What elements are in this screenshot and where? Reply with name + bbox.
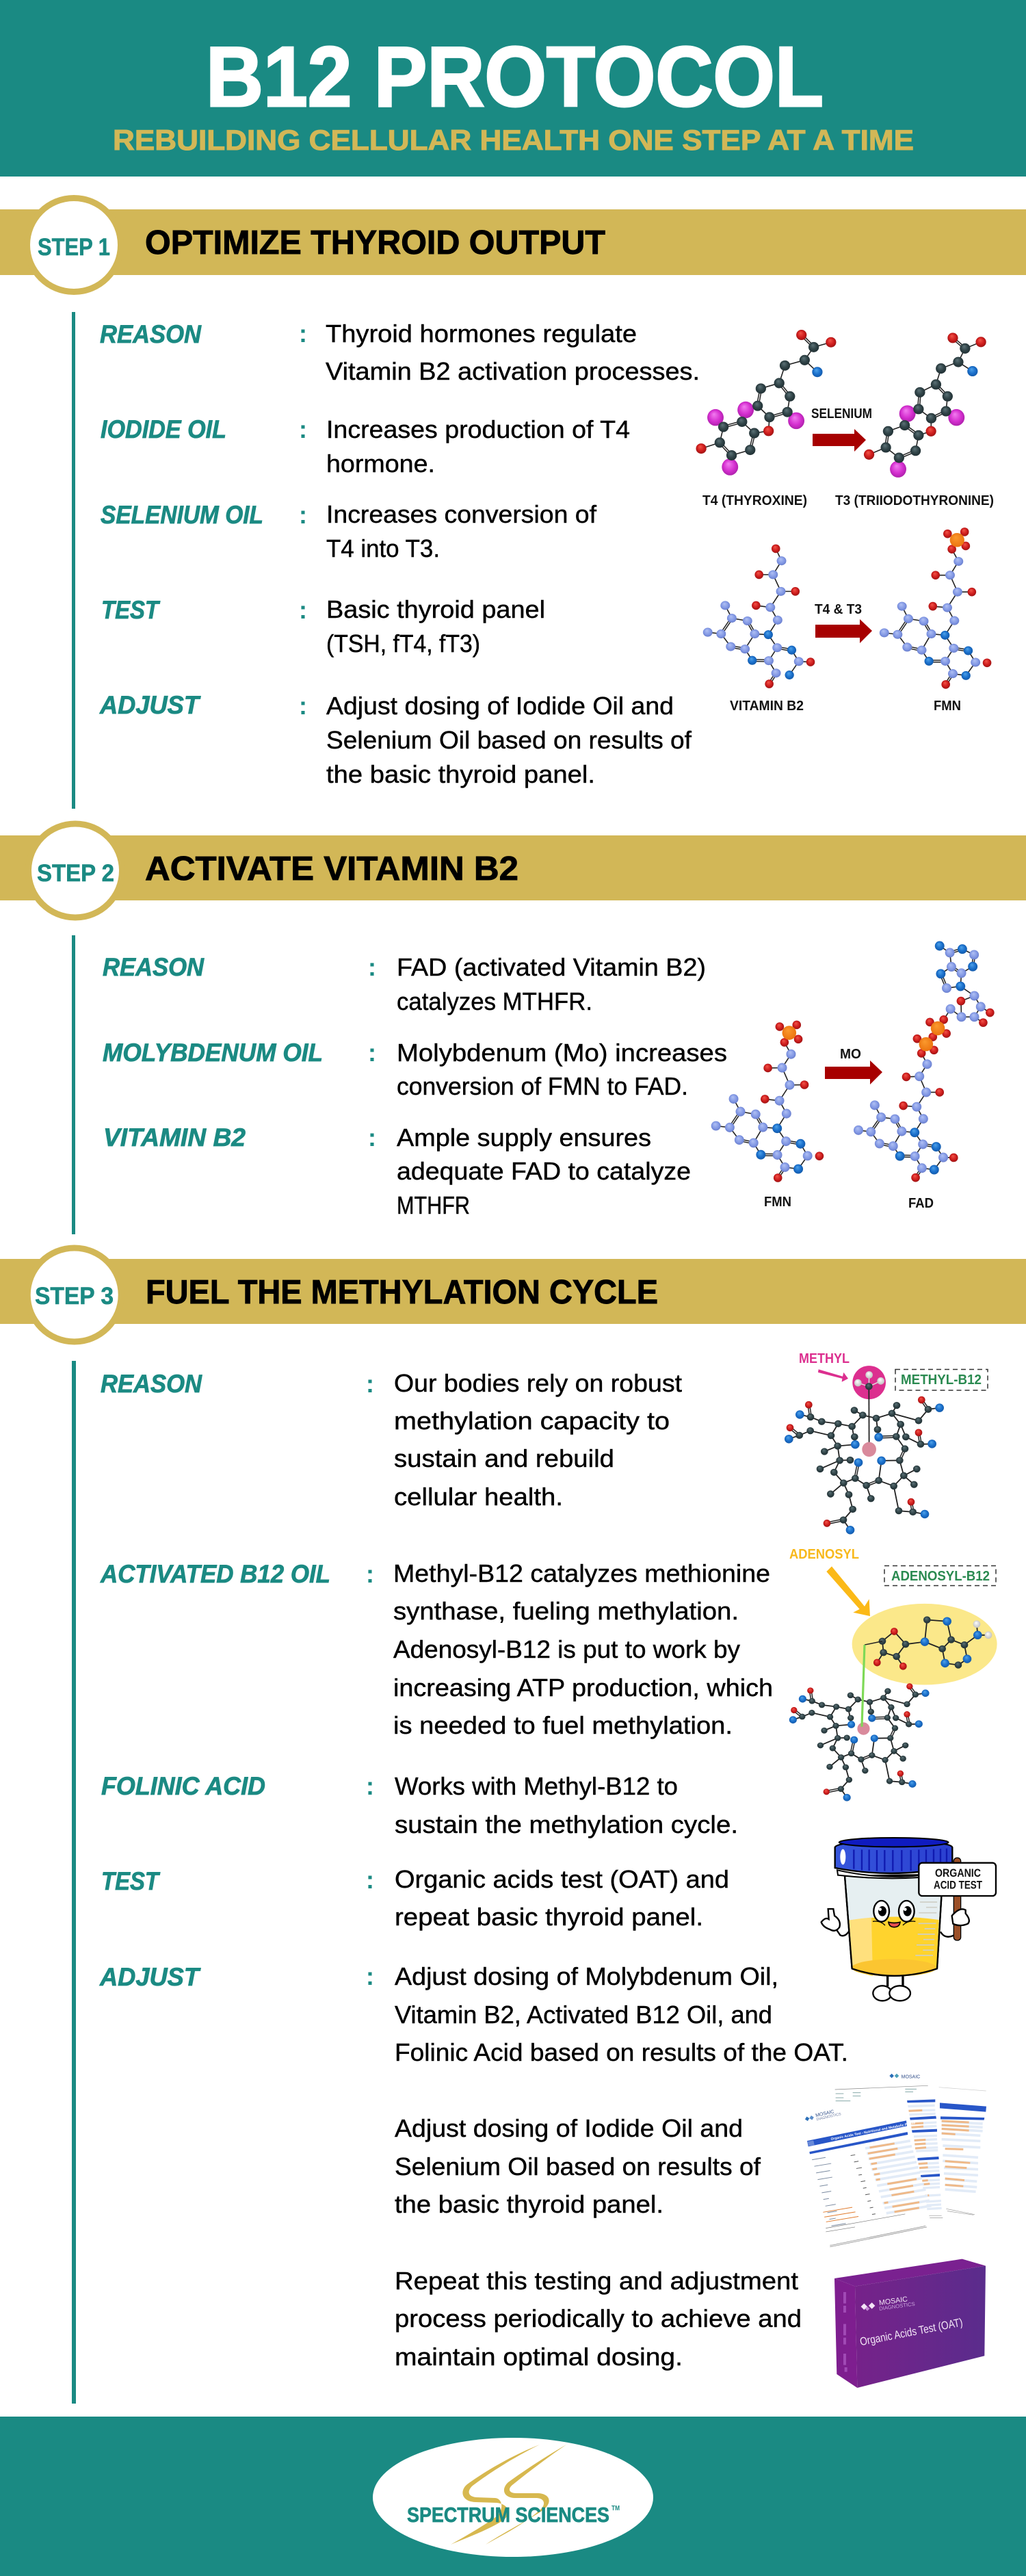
row: reason: Thyroid hormones regulate	[326, 320, 637, 348]
row: test: :	[299, 596, 307, 624]
row: reason: sustain and rebuild	[394, 1444, 614, 1472]
row: folinic acid: FOLINIC ACID	[101, 1772, 265, 1800]
step 3 header: STEP 3	[35, 1283, 114, 1310]
row: adjust: the basic thyroid panel.	[326, 760, 595, 788]
row: molybdenum oil: conversion of FMN to FAD.	[397, 1072, 688, 1100]
row: vitamin B2	[103, 1123, 691, 1219]
row: reason: cellular health.	[394, 1483, 563, 1511]
row: test: :	[366, 1866, 374, 1894]
molecule: FMN step 2	[711, 1021, 824, 1182]
arrow: selenium	[811, 406, 872, 452]
box logo: DIAGNOSTICS	[879, 2301, 915, 2312]
adjust paragraph 3: maintain optimal dosing.	[395, 2343, 683, 2371]
step 2 header	[0, 821, 1026, 921]
sign text	[934, 1866, 982, 1891]
label: adenosyl: ADENOSYL	[789, 1547, 859, 1562]
row: activated B12 oil: ACTIVATED B12 OIL	[100, 1560, 330, 1588]
adjust paragraph 2: the basic thyroid panel.	[395, 2190, 663, 2218]
row: adjust: Vitamin B2, Activated B12 Oil, and	[395, 2001, 772, 2029]
title: B12 PROTOCOL	[206, 30, 824, 125]
row: vitamin B2: Ample supply ensures	[397, 1123, 651, 1152]
row: folinic acid	[101, 1772, 738, 1838]
step 3 header: FUEL THE METHYLATION CYCLE	[146, 1274, 658, 1311]
row: test: Basic thyroid panel	[326, 595, 545, 623]
arrow: MO: MO	[840, 1047, 861, 1062]
label: T3: T3 (TRIIODOTHYRONINE)	[835, 493, 994, 508]
row: adjust	[99, 1962, 848, 2066]
step 3 header	[0, 1245, 1026, 1345]
row: reason	[101, 1369, 682, 1511]
report header logo: MOSAIC	[902, 2074, 920, 2079]
step 1 header: STEP 1	[38, 234, 110, 261]
image: OAT kit box	[834, 2259, 986, 2388]
sign text: ACID TEST	[934, 1879, 982, 1891]
row: reason: Our bodies rely on robust	[394, 1369, 682, 1397]
row: adjust: :	[366, 1962, 374, 1990]
report page 1: DIAGNOSTICS	[816, 2112, 842, 2122]
row: molybdenum oil: Molybdenum (Mo) increases	[397, 1039, 727, 1067]
row: reason: :	[366, 1370, 374, 1398]
row: iodide oil: :	[299, 415, 307, 443]
header band	[0, 0, 1026, 177]
row: iodide oil	[101, 415, 630, 478]
row: adjust: Selenium Oil based on results of	[326, 726, 692, 754]
adjust paragraph 3: Repeat this testing and adjustment	[395, 2267, 798, 2295]
adjust paragraph 2: Selenium Oil based on results of	[395, 2152, 761, 2181]
adjust paragraph 3: process periodically to achieve and	[395, 2304, 802, 2332]
box title: Organic Acids Test (OAT)	[858, 2315, 964, 2348]
icon: urine cup mascot with sign	[821, 1838, 996, 2001]
label: methyl: METHYL	[799, 1351, 850, 1366]
step 2 header: ACTIVATE VITAMIN B2	[145, 850, 518, 887]
logo: spectrum sciences: SPECTRUM SCIENCES	[407, 2503, 609, 2527]
sign text: ORGANIC	[935, 1866, 981, 1879]
arrow: T4 and T3	[815, 602, 872, 643]
row: reason: methylation capacity to	[394, 1407, 670, 1435]
row: test: TEST	[101, 1867, 161, 1895]
row: selenium oil: Increases conversion of	[326, 500, 597, 528]
step 2 text panel	[72, 935, 727, 1234]
label: FMN step 2: FMN	[764, 1195, 791, 1210]
row: folinic acid: sustain the methylation cycle.	[395, 1810, 738, 1838]
row: adjust	[99, 691, 692, 788]
report header logo	[889, 2074, 920, 2079]
row: activated B12 oil: synthase, fueling methylation.	[393, 1597, 739, 1625]
report page 3	[939, 2085, 987, 2215]
row: reason: catalyzes MTHFR.	[397, 987, 592, 1015]
label box: methyl-B12: METHYL-B12	[901, 1372, 982, 1388]
row: reason: FAD (activated Vitamin B2)	[397, 953, 706, 981]
row: adjust: ADJUST	[99, 691, 201, 719]
row: vitamin B2: MTHFR	[397, 1191, 470, 1219]
subtitle: REBUILDING CELLULAR HEALTH ONE STEP AT A TIME	[113, 124, 914, 156]
row: reason	[100, 320, 700, 385]
step 2 header: STEP 2	[37, 860, 114, 887]
row: activated B12 oil	[100, 1559, 773, 1739]
row: activated B12 oil: is needed to fuel methylation.	[393, 1711, 733, 1739]
row: test: TEST	[101, 596, 161, 624]
report page 2	[835, 2085, 944, 2228]
box logo	[861, 2295, 915, 2312]
label: T4: T4 (THYROXINE)	[702, 493, 807, 508]
row: vitamin B2: :	[368, 1123, 376, 1152]
row: adjust: Adjust dosing of Molybdenum Oil,	[395, 1962, 778, 1990]
row: reason: REASON	[100, 320, 202, 348]
row: test: (TSH, fT4, fT3)	[326, 629, 480, 658]
row: molybdenum oil: MOLYBDENUM OIL	[103, 1039, 323, 1067]
molecule: vitamin B2	[703, 545, 815, 688]
adjust paragraph 2	[395, 2114, 761, 2218]
step 1 header	[0, 195, 1026, 295]
molecule: FAD	[854, 941, 995, 1182]
row: selenium oil: SELENIUM OIL	[101, 501, 263, 529]
row: iodide oil: hormone.	[326, 450, 435, 478]
molecule: adenosyl-B12	[789, 1566, 997, 1801]
label: vitamin B2: VITAMIN B2	[730, 699, 804, 714]
label box: methyl-B12	[895, 1370, 988, 1390]
report page 1: Organic Acids Test - Nutritional and Metabolic Profile	[830, 2121, 916, 2142]
row: selenium oil	[101, 500, 597, 562]
row: adjust: ADJUST	[99, 1963, 201, 1991]
molecule: FMN	[880, 528, 991, 689]
row: vitamin B2: VITAMIN B2	[103, 1123, 246, 1152]
row: reason: Vitamin B2 activation processes.	[326, 357, 700, 385]
logo: spectrum sciences	[373, 2438, 653, 2557]
row: adjust: :	[299, 692, 307, 720]
molecule: methyl-B12	[785, 1366, 944, 1534]
molecule: T3 triiodothyronine	[864, 333, 986, 478]
step 1 text panel	[72, 312, 700, 809]
arrow: T4 and T3: T4 & T3	[815, 602, 862, 617]
footer	[0, 2417, 1026, 2576]
report page 1	[804, 2096, 931, 2248]
row: activated B12 oil: increasing ATP production, which	[393, 1674, 773, 1702]
row: activated B12 oil: Methyl-B12 catalyzes methionine	[393, 1559, 770, 1587]
row: molybdenum oil: :	[368, 1039, 376, 1067]
step 3 text panel	[72, 1361, 848, 2404]
row: folinic acid: Works with Methyl-B12 to	[395, 1772, 678, 1800]
row: iodide oil: IODIDE OIL	[101, 415, 226, 443]
row: vitamin B2: adequate FAD to catalyze	[397, 1157, 691, 1185]
arrow: selenium: SELENIUM	[811, 406, 872, 421]
row: molybdenum oil	[103, 1039, 727, 1100]
row: reason: REASON	[101, 1370, 202, 1398]
adjust paragraph 2: Adjust dosing of Iodide Oil and	[395, 2114, 743, 2142]
row: test	[101, 1865, 729, 1931]
row: adjust: Folinic Acid based on results of the OAT.	[395, 2038, 848, 2066]
row: iodide oil: Increases production of T4	[326, 415, 630, 443]
box logo: MOSAIC	[878, 2295, 908, 2307]
image: OAT report pages	[804, 2074, 987, 2248]
row: test: repeat basic thyroid panel.	[395, 1903, 703, 1931]
molecule: T4 thyroxine	[696, 330, 836, 476]
row: activated B12 oil: :	[366, 1560, 374, 1588]
label box: adenosyl-B12: ADENOSYL-B12	[891, 1569, 990, 1584]
label: FMN: FMN	[934, 699, 961, 714]
row: reason: REASON	[103, 953, 205, 981]
report page 1: MOSAIC	[815, 2109, 834, 2118]
adjust paragraph 3	[395, 2267, 802, 2371]
step 1 header: OPTIMIZE THYROID OUTPUT	[145, 224, 605, 261]
row: test	[101, 595, 545, 658]
row: selenium oil: T4 into T3.	[326, 534, 440, 562]
row: folinic acid: :	[366, 1772, 374, 1800]
row: selenium oil: :	[299, 501, 307, 529]
row: reason	[103, 953, 706, 1015]
row: reason: :	[368, 953, 376, 981]
row: adjust: Adjust dosing of Iodide Oil and	[326, 692, 674, 720]
row: activated B12 oil: Adenosyl-B12 is put to work by	[393, 1635, 740, 1663]
arrow: MO	[825, 1047, 882, 1084]
logo: spectrum sciences: TM	[611, 2505, 620, 2512]
row: test: Organic acids test (OAT) and	[395, 1865, 729, 1893]
row: reason: :	[299, 320, 307, 348]
label: FAD: FAD	[908, 1196, 934, 1211]
